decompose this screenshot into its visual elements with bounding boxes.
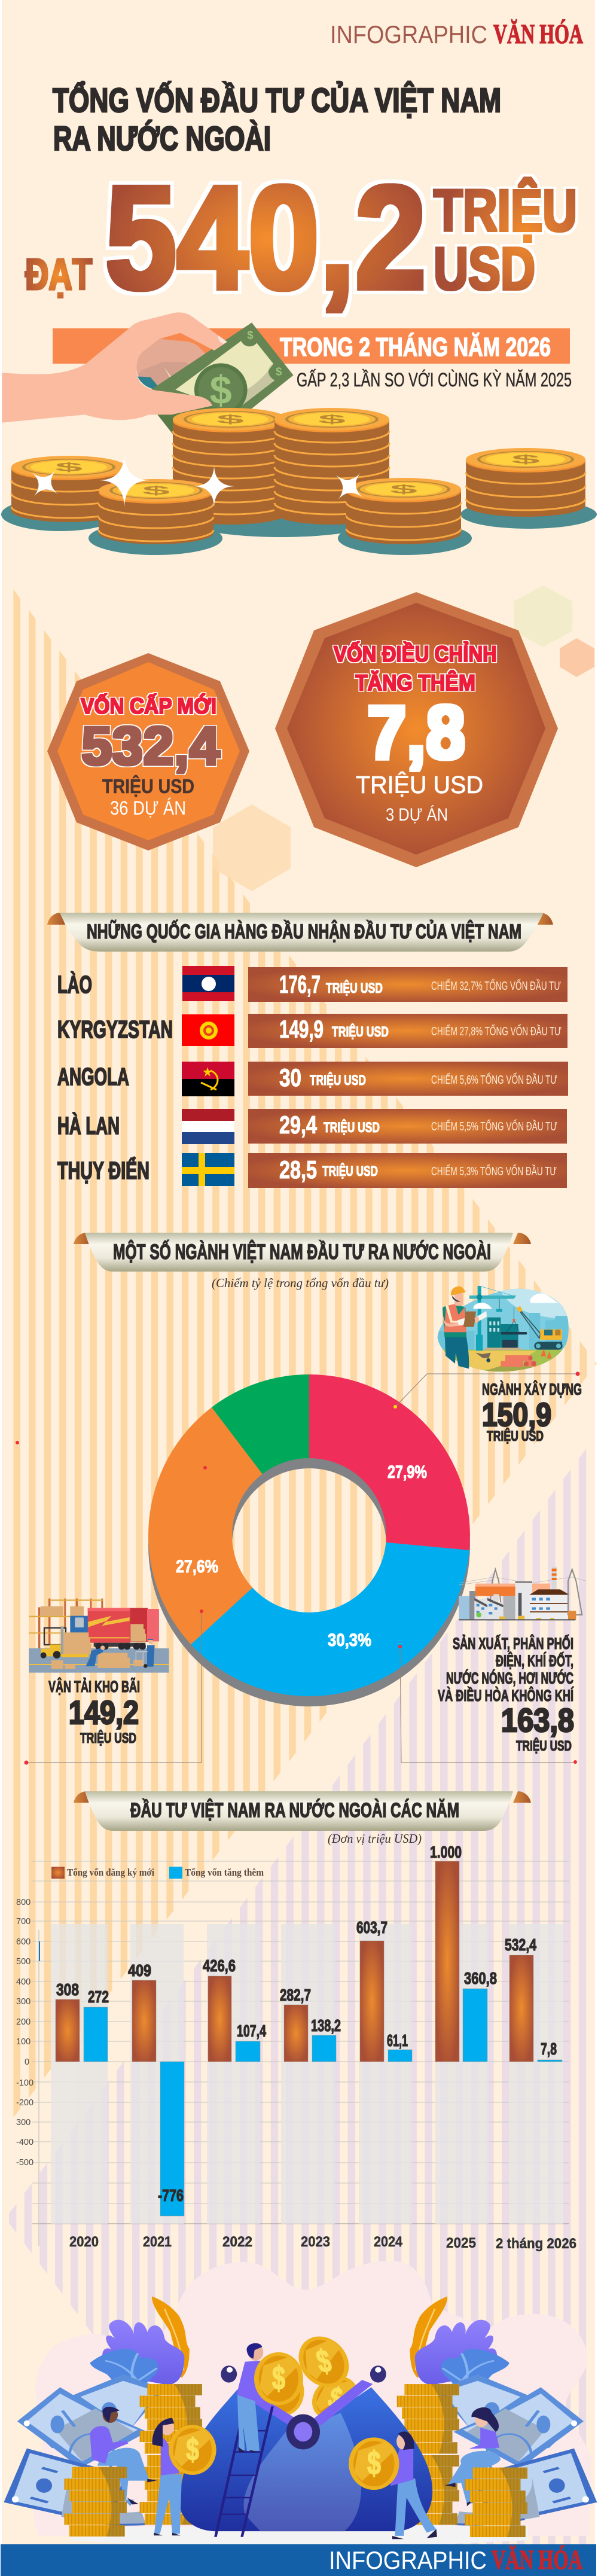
year labels: 2025 — [446, 2235, 476, 2251]
value labels — [56, 1843, 557, 2205]
pink background blob — [33, 2261, 591, 2536]
unit: TRIỆU USD — [102, 775, 194, 797]
icon: hand placing banknote: $ — [210, 368, 232, 413]
coin stack: front left — [99, 479, 213, 544]
icon: hand placing banknote: $ — [276, 365, 282, 377]
axis labels: 700 — [16, 1917, 30, 1926]
coin shadows — [1, 498, 597, 555]
icon: flag of Sweden — [182, 1153, 234, 1186]
headline figure 540,2 million USD — [25, 156, 577, 320]
value labels: 138,2 — [311, 2016, 341, 2035]
left banknotes — [4, 2374, 164, 2525]
year columns — [51, 1924, 563, 2224]
front coin stacks — [65, 2467, 527, 2537]
value bar: TRIỆU USD — [324, 1119, 380, 1136]
woman sitting with laptop — [445, 2407, 501, 2506]
man sitting with laptop — [90, 2407, 158, 2506]
label: construction: 150,9 — [482, 1396, 551, 1433]
axis labels: -500 — [16, 2158, 33, 2168]
label: transport — [48, 1676, 140, 1746]
value bar — [248, 1062, 568, 1096]
value bar: 30 — [279, 1063, 301, 1092]
country name: LÀO — [57, 971, 92, 998]
percentage labels — [176, 1462, 427, 1650]
icon: flag of Laos — [182, 966, 234, 1001]
panel: new capital octagon — [47, 653, 249, 850]
icon: flag of Angola — [182, 1062, 234, 1096]
percentage labels: 27,9% — [388, 1462, 427, 1482]
heading: adjusted capital — [334, 641, 497, 695]
purse — [180, 2365, 432, 2531]
subtitle: (Chiếm tỷ lệ trong tổng vốn đầu tư) — [212, 1276, 389, 1290]
label: transport: VẬN TẢI KHO BÃI — [48, 1676, 140, 1696]
icon: flag of Kyrgyzstan — [182, 1014, 234, 1046]
axis labels — [16, 1898, 33, 2168]
axis labels: 0 — [25, 2057, 29, 2067]
label: construction: TRIỆU USD — [487, 1428, 544, 1444]
year labels: 2023 — [301, 2234, 330, 2250]
legend: Tổng vốn đăng ký mới — [67, 1867, 154, 1878]
heading banner: top recipient countries — [47, 913, 553, 952]
value bar: TRIỆU USD — [322, 1163, 378, 1179]
segment: energy — [191, 1542, 469, 1696]
row: Laos — [57, 966, 568, 1002]
value labels: 1.000 — [430, 1843, 462, 1861]
segment: construction — [309, 1374, 470, 1550]
value bar — [248, 1109, 567, 1144]
heading: new capital: VỐN CẤP MỚI — [81, 693, 216, 718]
label: energy: 163,8 — [501, 1702, 574, 1739]
icon: warehouse truck — [29, 1599, 169, 1673]
year labels: 2024 — [374, 2234, 403, 2250]
value labels: 308 — [56, 1980, 79, 1999]
row: Angola — [57, 1062, 568, 1096]
axis labels: 300 — [16, 1997, 30, 2007]
purse coins — [263, 2334, 364, 2421]
icon: hand placing banknote — [2, 312, 294, 450]
title — [53, 81, 501, 158]
value bar: 29,4 — [279, 1111, 317, 1139]
percentage labels: 30,3% — [328, 1630, 371, 1650]
axis labels: -200 — [16, 2098, 33, 2108]
percentage labels: 27,6% — [176, 1557, 218, 1577]
label: energy — [438, 1633, 574, 1754]
axis labels: 300 — [16, 2118, 30, 2127]
decorative purple striped diamond — [5, 1447, 588, 2544]
value labels: 360,8 — [464, 1969, 497, 1987]
period band — [53, 328, 570, 364]
bars — [56, 1861, 562, 2216]
unit: TRIỆU USD — [356, 771, 483, 798]
value bar: TRIỆU USD — [332, 1023, 389, 1040]
callout dots — [16, 1372, 580, 1764]
brand header — [330, 19, 583, 49]
right banknotes — [437, 2374, 597, 2525]
value labels: 7,8 — [541, 2040, 557, 2058]
person on ladder — [237, 2343, 303, 2452]
year labels: 2 tháng 2026 — [496, 2236, 576, 2252]
footer band: INFOGRAPHIC — [329, 2546, 487, 2574]
year labels: 2021 — [143, 2234, 172, 2250]
coin stack: back right — [274, 408, 389, 525]
value labels: 61,1 — [387, 2031, 408, 2050]
coin stack: back left — [173, 408, 288, 525]
construction worker — [443, 1287, 487, 1368]
country name: ANGOLA — [57, 1063, 129, 1090]
value: 7,8: 7,8 — [367, 690, 465, 775]
value bar: TRIỆU USD — [310, 1072, 366, 1089]
segment: other — [212, 1374, 309, 1474]
floor — [69, 2525, 528, 2547]
ladder — [215, 2406, 273, 2537]
headline figure 540,2 million USD: 540,2 — [105, 156, 426, 320]
title: RA NƯỚC NGOÀI — [53, 120, 271, 158]
coin stack: front right — [346, 478, 461, 544]
heading banner: investment by year: ĐẦU TƯ VIỆT NAM RA NƯỚC NGOÀI CÁC NĂM — [130, 1799, 459, 1822]
value bar: TRIỆU USD — [326, 980, 383, 996]
value labels: 426,6 — [203, 1956, 236, 1975]
value labels: 603,7 — [356, 1918, 388, 1937]
country name: THỤY ĐIỂN — [57, 1156, 150, 1184]
headline figure 540,2 million USD: USD — [434, 236, 535, 303]
woman with coin, left — [152, 2418, 216, 2535]
value labels: 107,4 — [237, 2022, 266, 2040]
headline figure 540,2 million USD: ĐẠT — [25, 249, 92, 299]
right leaves — [410, 2296, 509, 2400]
value bar: 176,7 — [279, 970, 321, 998]
axis labels: 400 — [16, 1977, 30, 1987]
value bar — [248, 1153, 567, 1188]
axis labels: -100 — [16, 2078, 33, 2088]
axis labels: 600 — [16, 1937, 30, 1947]
country name: HÀ LAN — [57, 1112, 120, 1139]
axis labels: 200 — [16, 2017, 30, 2027]
value bar: 28,5 — [279, 1156, 317, 1184]
value bar: 149,9 — [279, 1015, 324, 1043]
project count: 3 DỰ ÁN — [386, 805, 448, 825]
bar chart — [16, 1843, 576, 2252]
value bar — [248, 1014, 568, 1048]
year labels: 2020 — [69, 2234, 99, 2250]
sparkles — [22, 453, 374, 511]
legend: Tổng vốn tăng thêm — [185, 1867, 264, 1878]
value labels: 532,4 — [505, 1935, 536, 1954]
woman with coin, right — [349, 2431, 437, 2539]
country name: KYRGYZSTAN — [57, 1016, 173, 1043]
label: transport: 149,2 — [69, 1694, 139, 1731]
coin stacks — [11, 408, 585, 544]
footer band — [1, 2544, 596, 2576]
axis labels: 500 — [16, 1957, 30, 1967]
heading: adjusted capital: VỐN ĐIỀU CHỈNH — [334, 641, 497, 666]
icon: flag of Netherlands — [182, 1109, 234, 1144]
icon: construction site — [438, 1286, 569, 1372]
value labels: 409 — [128, 1961, 151, 1980]
axis labels: 100 — [16, 2037, 30, 2047]
icon: power plant — [459, 1566, 586, 1620]
heading: adjusted capital: TĂNG THÊM — [355, 670, 475, 695]
back coin stacks — [140, 2384, 459, 2525]
axis line — [38, 1930, 39, 2246]
decorative hexagons — [213, 586, 594, 891]
decorative orange striped diamond — [13, 589, 597, 2118]
value: 532,4: 532,4 — [81, 717, 220, 776]
icon: hand placing banknote: $ — [247, 329, 254, 342]
segment: transport — [148, 1407, 263, 1644]
axis labels: 800 — [16, 1898, 30, 1907]
coin stack: far left — [11, 456, 126, 522]
brand header: INFOGRAPHIC — [330, 20, 487, 48]
row: Netherlands — [57, 1109, 567, 1144]
row: Sweden — [57, 1153, 567, 1188]
label: construction — [482, 1380, 582, 1444]
legend — [51, 1867, 264, 1879]
axis labels: -400 — [16, 2138, 33, 2147]
year labels: 2022 — [222, 2234, 252, 2250]
illustration: people and money purse — [4, 2261, 597, 2547]
row: Kyrgyzstan — [57, 1014, 568, 1048]
value labels: 282,7 — [280, 1986, 311, 2004]
project count: 36 DỰ ÁN — [110, 797, 186, 819]
unit note: (Đơn vị triệu USD) — [328, 1831, 422, 1846]
year labels — [69, 2234, 576, 2252]
label: energy: TRIỆU USD — [516, 1737, 572, 1754]
value labels: 272 — [88, 1987, 109, 2006]
panel: adjusted capital octagon — [275, 592, 558, 867]
label: transport: TRIỆU USD — [80, 1730, 136, 1746]
donut chart — [148, 1374, 470, 1706]
coin stack: far right — [466, 448, 585, 517]
value labels: -776 — [158, 2186, 184, 2205]
value bar — [248, 967, 568, 1002]
callout leader lines — [26, 1374, 578, 1763]
heading banner: sectors — [74, 1233, 531, 1272]
heading banner: investment by year — [74, 1791, 531, 1831]
left leaves — [90, 2296, 190, 2400]
